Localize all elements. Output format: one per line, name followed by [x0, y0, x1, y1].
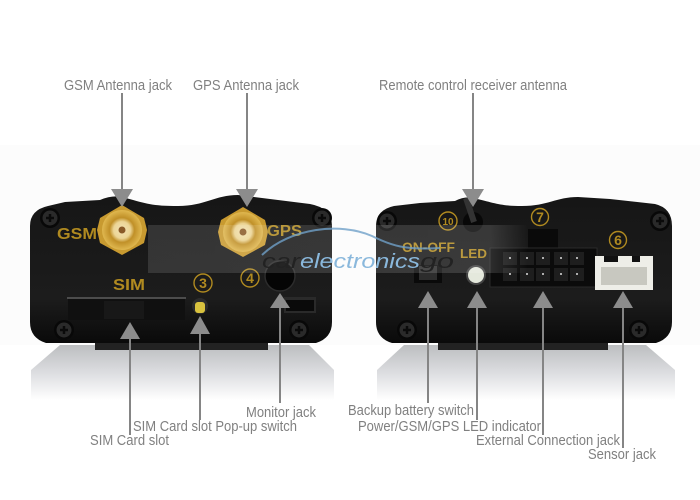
GSM label: GSM: [57, 226, 97, 243]
watermark band: [148, 225, 528, 273]
label: SIM Card slot: SIM Card slot: [90, 432, 170, 449]
device: rear panel: [376, 197, 672, 350]
GSM connector: [97, 205, 147, 255]
GPS label: GPS: [267, 223, 302, 240]
watermark logo: electronics: [300, 251, 420, 273]
watermark logo: [262, 229, 454, 273]
sensor jack: [595, 256, 653, 290]
number 7: [532, 208, 548, 226]
screws: [40, 208, 332, 340]
watermark logo: car: [262, 251, 302, 273]
screws: [377, 211, 670, 340]
arrow: monitor jack: [270, 293, 290, 403]
SIM label: SIM: [113, 277, 145, 294]
label: Remote control receiver antenna: Remote control receiver antenna: [379, 77, 568, 94]
label: GPS Antenna jack: GPS Antenna jack: [193, 77, 299, 94]
USB port: [284, 297, 316, 313]
SIM slot: [67, 297, 186, 320]
arrow: GPS antenna: [236, 93, 258, 207]
arrow: remote antenna: [462, 93, 484, 207]
arrow: pop-up switch: [190, 316, 210, 420]
monitor jack: [265, 261, 295, 291]
ON-OFF label: ON-OFF: [402, 239, 455, 255]
backup switch: [414, 265, 442, 283]
number 4: 4: [246, 270, 254, 286]
arrow: sensor jack: [613, 291, 633, 448]
arrow: SIM slot: [120, 322, 140, 435]
device: front panel: [30, 195, 332, 350]
background panel: [0, 145, 700, 345]
label: Power/GSM/GPS LED indicator: Power/GSM/GPS LED indicator: [358, 418, 541, 435]
number 7: 7: [536, 209, 544, 225]
watermark logo: go: [420, 251, 454, 273]
reflection: right device: [377, 345, 675, 400]
number 3: [194, 274, 212, 292]
reflection: left device: [31, 345, 334, 400]
external connector: [490, 229, 597, 287]
number 4: [241, 269, 259, 287]
arrow: external connection: [533, 291, 553, 435]
label: Backup battery switch: Backup battery switch: [348, 402, 474, 419]
label: SIM Card slot Pop-up switch: SIM Card slot Pop-up switch: [133, 418, 297, 435]
label: External Connection jack: External Connection jack: [476, 432, 620, 449]
number 10: 10: [442, 217, 454, 228]
label: Sensor jack: Sensor jack: [588, 446, 656, 463]
GPS connector: [218, 207, 268, 257]
arrow: GSM antenna: [111, 93, 133, 207]
number 6: [610, 232, 626, 248]
arrow: backup switch: [418, 291, 438, 403]
number 6: 6: [614, 232, 622, 248]
number 3: 3: [199, 275, 207, 291]
number 10: [439, 212, 457, 230]
LED label: LED: [460, 246, 487, 261]
remote antenna: [463, 198, 483, 232]
LED bulb: [466, 265, 486, 285]
arrow: LED indicator: [467, 291, 487, 420]
label: GSM Antenna jack: GSM Antenna jack: [64, 77, 172, 94]
label: Monitor jack: Monitor jack: [246, 404, 316, 421]
pop-up button: [192, 298, 208, 314]
